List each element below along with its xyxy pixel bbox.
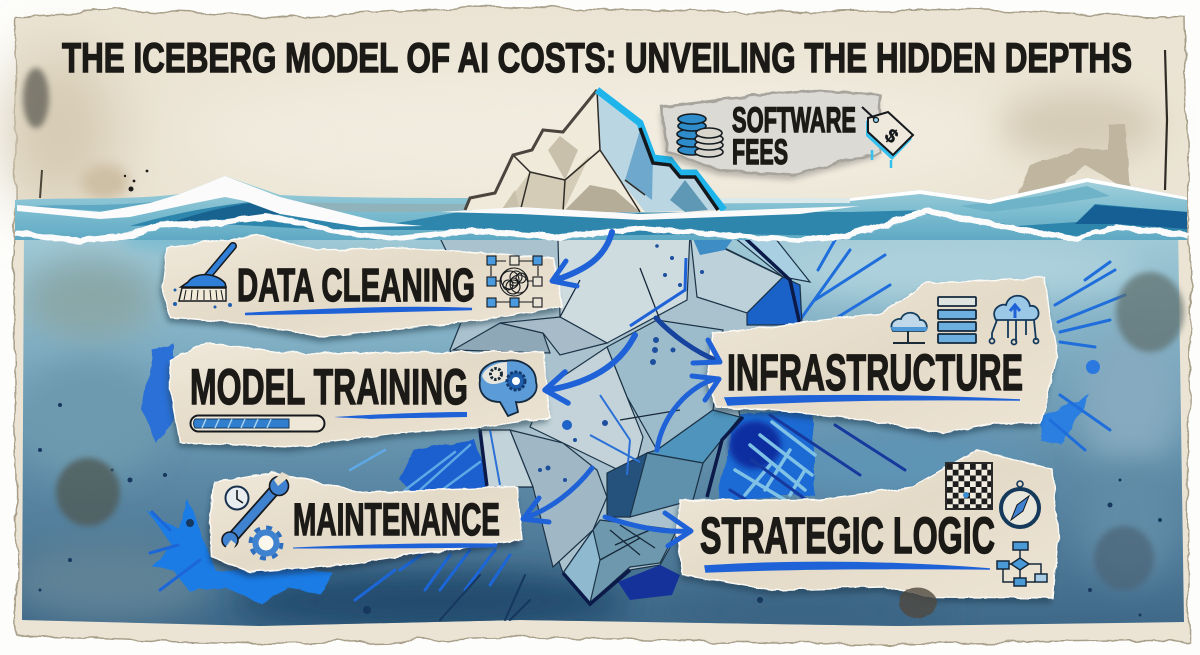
icon: chess board — [946, 463, 992, 509]
ink splashes — [38, 240, 1162, 620]
icon: compass — [1001, 481, 1039, 527]
icon: gear — [250, 528, 282, 558]
panel: maintenance — [210, 472, 522, 572]
icon: brain with gears — [480, 360, 537, 416]
arrow: to data cleaning — [552, 232, 612, 286]
icon: tangled data network — [487, 256, 542, 307]
iceberg: tip above water — [465, 90, 725, 215]
water surface: back layer — [15, 176, 1187, 240]
iceberg: submerged part — [440, 232, 810, 604]
panel: infrastructure — [707, 278, 1057, 433]
label: data cleaning: DATA CLEANING — [237, 259, 475, 311]
label: software fees — [732, 101, 856, 172]
icon: network cloud — [890, 313, 927, 343]
progress bar — [190, 416, 324, 432]
panel: data cleaning — [162, 235, 562, 337]
stain on strategic logic panel — [899, 588, 937, 618]
underline: strategic logic — [705, 562, 990, 572]
label: strategic logic: STRATEGIC LOGIC — [700, 507, 995, 564]
panel: strategic logic — [677, 450, 1058, 618]
icon: coin stacks — [677, 114, 723, 157]
icon: flow chart — [997, 542, 1047, 586]
stains — [56, 272, 1184, 590]
arrow: to strategic logic — [605, 513, 691, 546]
panel: model training — [170, 342, 550, 447]
icon: scrub brush — [173, 246, 233, 308]
arrow: secondary stroke on iceberg — [630, 258, 686, 326]
arrow: to maintenance — [523, 468, 592, 522]
underline: data cleaning — [245, 308, 472, 314]
panel: software fees — [662, 90, 913, 175]
label: model training: MODEL TRAINING — [190, 359, 468, 415]
underline: infrastructure — [725, 396, 1020, 405]
arrow: to infrastructure lower — [657, 376, 719, 450]
icon: clock — [226, 486, 248, 510]
underwater panel — [10, 222, 1188, 634]
label: maintenance: MAINTENANCE — [293, 494, 500, 545]
icon: server rack — [938, 297, 976, 343]
underline: model training — [334, 412, 467, 419]
icon: cloud upload circuit — [990, 296, 1039, 344]
label: software fees: SOFTWARE — [732, 101, 856, 140]
water surface: front layer — [15, 176, 1187, 244]
underline: maintenance — [293, 544, 497, 548]
icon: price tag — [862, 107, 913, 168]
arrow: to infrastructure upper — [656, 318, 720, 363]
icon: wrench — [222, 472, 290, 552]
arrow: to model training — [545, 335, 635, 403]
label: infrastructure: INFRASTRUCTURE — [727, 344, 1023, 401]
icon: price tag: $ — [880, 125, 902, 148]
label: software fees: FEES — [732, 133, 788, 172]
